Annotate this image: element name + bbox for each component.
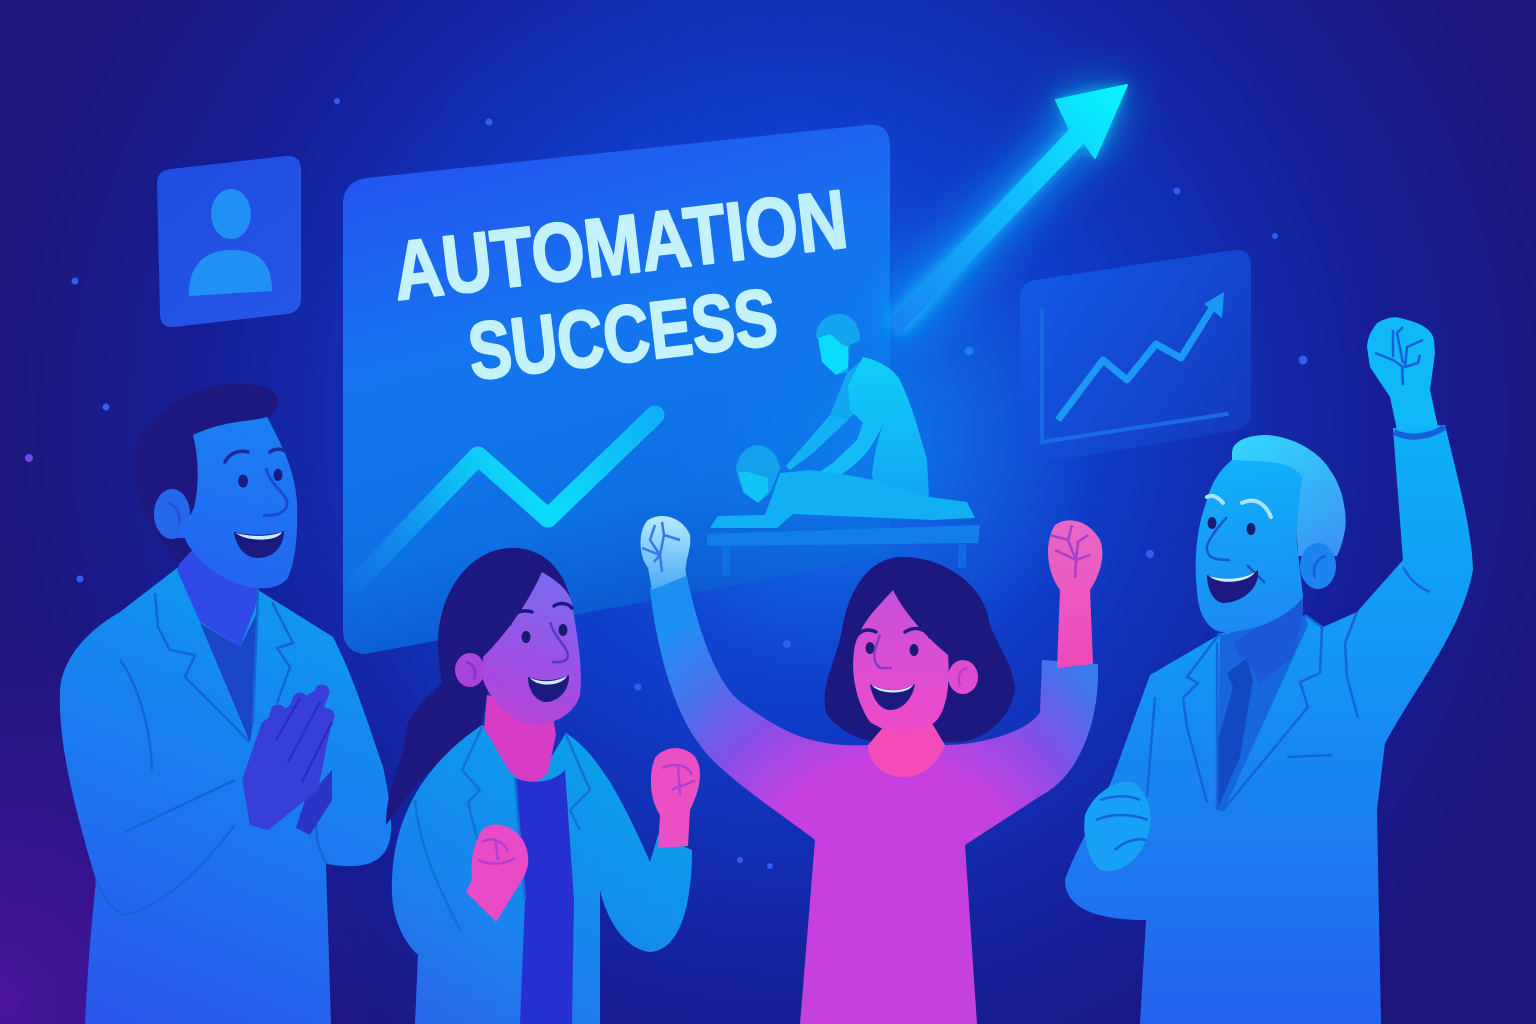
hair	[133, 384, 278, 563]
neck and collar	[177, 543, 262, 647]
raised fist: left	[640, 516, 690, 590]
massage area glow	[620, 200, 1100, 680]
fist: left	[466, 824, 528, 922]
massage table	[707, 525, 980, 576]
cuff	[1394, 427, 1445, 437]
face	[1196, 460, 1303, 632]
background particles	[25, 98, 1308, 869]
panel heading: automation success	[388, 172, 852, 398]
lapels	[415, 727, 590, 930]
lapels and coat folds	[96, 590, 327, 915]
therapist figure	[786, 314, 929, 497]
raised fist: right	[1048, 520, 1102, 668]
panel heading: automation success: AUTOMATION	[388, 172, 852, 318]
facial features	[510, 604, 572, 702]
hair	[1232, 435, 1346, 556]
coat	[392, 725, 692, 1024]
lower fist	[1084, 782, 1151, 871]
icon card: user profile	[157, 156, 301, 327]
large glass panel	[343, 125, 890, 654]
patient figure	[710, 445, 975, 528]
person: older man cheering	[1065, 317, 1473, 1024]
person: woman cheering	[640, 516, 1102, 1024]
coat	[1065, 425, 1473, 1024]
shirt	[650, 572, 1098, 1024]
panel heading: automation success: SUCCESS	[464, 272, 782, 398]
raised fist	[1367, 317, 1438, 430]
person: woman in lab coat	[386, 548, 700, 1024]
ear	[948, 660, 978, 694]
shirt	[1217, 615, 1308, 812]
fist: right	[651, 748, 700, 848]
ear	[1300, 543, 1336, 589]
chart card	[1020, 250, 1251, 464]
face	[483, 572, 581, 724]
inner shirt	[515, 770, 574, 1024]
face	[853, 590, 949, 733]
panel line chart	[355, 415, 655, 584]
ear	[455, 653, 485, 687]
trend arrow	[890, 85, 1127, 335]
hair	[825, 557, 1015, 745]
facial features	[1207, 496, 1271, 603]
face	[178, 417, 297, 588]
neck	[868, 720, 945, 788]
lapels and coat folds	[1147, 567, 1430, 810]
tie	[1217, 658, 1253, 810]
massage illustration	[707, 314, 980, 576]
neck	[484, 695, 556, 782]
inner shirt	[200, 613, 257, 742]
person: man clapping	[60, 384, 391, 1024]
clapping hands	[242, 690, 332, 835]
facial features	[225, 449, 287, 558]
collar	[1233, 597, 1303, 683]
facial features	[856, 629, 930, 710]
hair back	[386, 548, 570, 825]
coat	[60, 568, 391, 1024]
ear	[154, 489, 190, 539]
